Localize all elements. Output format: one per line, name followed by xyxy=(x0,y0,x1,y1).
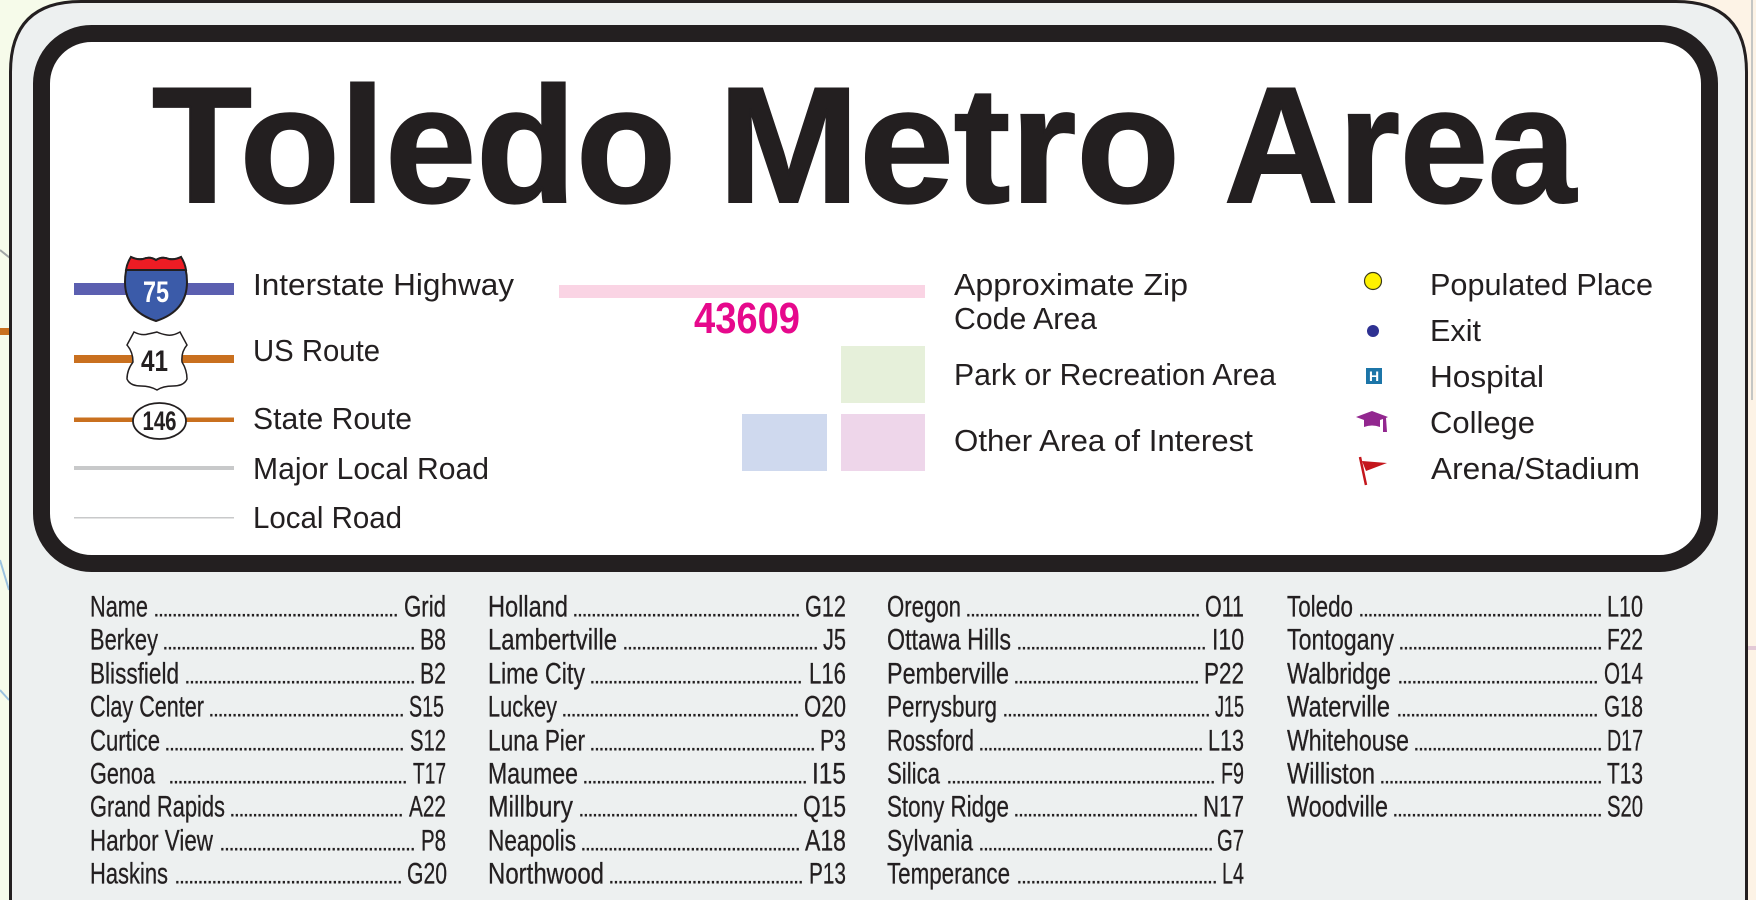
row: Sylvania xyxy=(887,824,1244,858)
row: Harbor View xyxy=(90,824,446,858)
icon: college xyxy=(1356,411,1388,432)
row: Harbor View: P8 xyxy=(421,824,446,858)
index column 2 xyxy=(488,590,846,890)
row: Toledo xyxy=(1287,590,1643,624)
map fragment: right edge roads xyxy=(1748,0,1756,648)
swatch: other area blue xyxy=(742,414,827,471)
row: Toledo: L10 xyxy=(1607,590,1643,624)
swatch: park xyxy=(841,346,925,403)
row: Genoa xyxy=(90,758,446,790)
row: Walbridge: Walbridge xyxy=(1287,658,1391,690)
row: Ottawa Hills: I10 xyxy=(1212,624,1244,656)
row: Williston xyxy=(1287,758,1643,790)
row: Luna Pier xyxy=(488,724,846,758)
local road label: Local Road xyxy=(253,500,402,535)
panel: black framed legend box xyxy=(42,34,1710,564)
arena label: Arena/Stadium xyxy=(1431,451,1640,486)
row: Pemberville xyxy=(887,658,1244,690)
row: Perrysburg xyxy=(887,690,1244,724)
major local road line xyxy=(74,466,234,470)
other area label: Other Area of Interest xyxy=(954,423,1253,458)
row: Northwood: P13 xyxy=(809,858,846,890)
row: Maumee: Maumee xyxy=(488,758,578,790)
row: Temperance: L4 xyxy=(1222,858,1244,890)
row: Oregon: O11 xyxy=(1205,590,1244,624)
icon: interstate shield 75: 75 xyxy=(143,276,169,309)
index column 1 xyxy=(90,590,447,890)
row: Northwood: Northwood xyxy=(488,858,604,890)
row: Pemberville: ........................................ xyxy=(1013,662,1200,690)
icon: state route oval 146: 146 xyxy=(142,406,176,436)
index column 4 xyxy=(1287,590,1643,824)
row: Whitehouse: ......................................... xyxy=(1413,730,1603,756)
row: Lambertville: .......................................... xyxy=(622,628,819,656)
row: Silica: F9 xyxy=(1221,758,1244,790)
interstate highway line xyxy=(74,283,234,295)
title: Metro xyxy=(718,53,1180,237)
row: Neapolis xyxy=(488,824,846,858)
icon: populated place xyxy=(1364,272,1382,290)
icon: state route oval 146 xyxy=(133,403,186,439)
row: Luna Pier: ................................................. xyxy=(589,730,816,756)
college label: College xyxy=(1430,405,1535,440)
row: Waterville: Waterville xyxy=(1287,690,1390,724)
row: Curtice xyxy=(90,724,446,758)
row: Walbridge: O14 xyxy=(1604,658,1643,690)
row: Harbor View: .......................................... xyxy=(219,830,416,856)
row: Waterville xyxy=(1287,690,1643,724)
row: Haskins: G20 xyxy=(407,858,447,890)
icon: hospital xyxy=(1366,368,1382,384)
legend: areas xyxy=(559,267,1277,471)
row: Temperance: ........................................... xyxy=(1016,862,1218,890)
row: Temperance: Temperance xyxy=(887,858,1010,890)
row: Clay Center: .......................................... xyxy=(208,696,405,722)
row: Haskins: ................................................. xyxy=(174,862,403,890)
zip code label: Approximate Zip xyxy=(954,267,1188,302)
zip code label: Code Area xyxy=(954,301,1098,336)
row: Sylvania: ................................................... xyxy=(978,830,1214,856)
row: Whitehouse: Whitehouse xyxy=(1287,724,1409,758)
row: Silica: Silica xyxy=(887,758,940,790)
row: Lambertville xyxy=(488,624,846,656)
row: Blissfield: Blissfield xyxy=(90,658,179,690)
row: Curtice: .................................................... xyxy=(164,730,405,756)
row: Oregon: Oregon xyxy=(887,590,961,624)
row: Pemberville: Pemberville xyxy=(887,658,1009,690)
icon: exit xyxy=(1367,325,1379,337)
row: Northwood xyxy=(488,858,846,890)
row: Tontogany: ............................................ xyxy=(1398,628,1603,656)
row: Waterville: G18 xyxy=(1604,690,1643,724)
row: Name Grid: ..................................................... xyxy=(153,596,399,622)
row: Grand Rapids: A22 xyxy=(409,790,446,824)
zip code label xyxy=(954,267,1188,336)
icon: interstate shield 75 xyxy=(125,257,187,321)
row: Millbury: Millbury xyxy=(488,790,573,824)
row: Genoa: T17 xyxy=(413,758,446,790)
row: Williston: T13 xyxy=(1607,758,1643,790)
index column 3 xyxy=(887,590,1244,890)
row: Sylvania: G7 xyxy=(1217,824,1244,858)
row: Luckey: Luckey xyxy=(488,690,557,724)
row: Stony Ridge: Stony Ridge xyxy=(887,790,1009,824)
row: Holland: ................................................. xyxy=(572,596,801,622)
row: Lime City: .............................................. xyxy=(589,662,803,690)
row: Ottawa Hills: Ottawa Hills xyxy=(887,624,1011,656)
row: Millbury: ................................................ xyxy=(578,796,799,822)
row: Walbridge xyxy=(1287,658,1643,690)
row: Millbury xyxy=(488,790,846,824)
row: Perrysburg: J15 xyxy=(1215,690,1244,724)
row: Clay Center xyxy=(90,690,444,724)
row: Luckey: ................................................... xyxy=(561,696,800,722)
row: Woodville xyxy=(1287,790,1643,824)
row: Luna Pier: P3 xyxy=(820,724,846,758)
us route label: US Route xyxy=(253,333,380,368)
row: Blissfield: B2 xyxy=(420,658,446,690)
state route label: State Route xyxy=(253,401,412,436)
legend: road types xyxy=(74,257,515,535)
row: Millbury: Q15 xyxy=(803,790,846,824)
row: Berkey xyxy=(90,624,446,656)
row: Perrysburg: ............................................. xyxy=(1002,696,1211,722)
row: Berkey: Berkey xyxy=(90,624,158,656)
row: Stony Ridge: ........................................ xyxy=(1013,796,1199,822)
row: Clay Center: Clay Center xyxy=(90,690,204,724)
icon: us route shield 41 xyxy=(127,332,187,390)
state route line xyxy=(74,418,234,422)
row: Genoa: Genoa xyxy=(90,758,155,790)
row: Clay Center: S15 xyxy=(409,690,444,724)
row: Luckey xyxy=(488,690,846,724)
row: Rossford: L13 xyxy=(1208,724,1244,758)
icon: hospital: H xyxy=(1369,368,1379,384)
row: Luckey: O20 xyxy=(804,690,846,724)
zip code bar xyxy=(559,285,925,298)
zip code number: 43609 xyxy=(694,294,800,343)
row: Haskins: Haskins xyxy=(90,858,168,890)
icon: arena flag xyxy=(1360,457,1387,485)
hospital label: Hospital xyxy=(1430,359,1544,394)
row: Silica: .......................................................... xyxy=(946,762,1216,790)
row: Holland xyxy=(488,590,846,624)
row: Name Grid xyxy=(90,590,446,624)
row: Berkey: B8 xyxy=(420,624,446,656)
title xyxy=(152,53,1577,237)
row: Ottawa Hills: ......................................... xyxy=(1016,628,1207,656)
row: Haskins xyxy=(90,858,447,890)
row: Maumee: ................................................. xyxy=(582,762,808,790)
row: Walbridge: ........................................... xyxy=(1397,662,1599,690)
title: Toledo xyxy=(152,53,676,237)
interstate highway label: Interstate Highway xyxy=(253,267,515,302)
row: Tontogany: F22 xyxy=(1607,624,1643,656)
row: Grand Rapids xyxy=(90,790,446,824)
row: Maumee xyxy=(488,758,846,790)
row: Stony Ridge xyxy=(887,790,1244,824)
row: Rossford: ................................................. xyxy=(978,730,1204,756)
row: Neapolis: Neapolis xyxy=(488,824,576,858)
row: Whitehouse: D17 xyxy=(1607,724,1643,758)
row: Pemberville: P22 xyxy=(1204,658,1244,690)
row: Holland: G12 xyxy=(805,590,846,624)
row: Stony Ridge: N17 xyxy=(1203,790,1244,824)
populated place label: Populated Place xyxy=(1430,267,1653,302)
swatch: other area pink xyxy=(841,414,925,471)
park label: Park or Recreation Area xyxy=(954,357,1277,392)
row: Oregon: ................................................... xyxy=(965,596,1201,622)
row: Tontogany: Tontogany xyxy=(1287,624,1394,656)
row: Lambertville: J5 xyxy=(823,624,846,656)
exit label: Exit xyxy=(1430,313,1481,348)
row: Williston: Williston xyxy=(1287,758,1375,790)
row: Lime City: L16 xyxy=(809,658,846,690)
legend: points xyxy=(1356,267,1653,486)
row: Rossford xyxy=(887,724,1244,758)
row: Ottawa Hills xyxy=(887,624,1244,656)
row: Grand Rapids: Grand Rapids xyxy=(90,790,225,824)
major local road label: Major Local Road xyxy=(253,451,489,486)
row: Lime City xyxy=(488,658,846,690)
row: Genoa: .................................................... xyxy=(168,762,408,790)
row: Luna Pier: Luna Pier xyxy=(488,724,585,758)
row: Neapolis: A18 xyxy=(805,824,846,858)
row: Harbor View: Harbor View xyxy=(90,824,213,858)
row: Berkey: ....................................................... xyxy=(162,628,416,656)
row: Maumee: I15 xyxy=(812,758,846,790)
row: Woodville: ............................................. xyxy=(1392,796,1603,822)
title: Area xyxy=(1224,53,1577,237)
us route line xyxy=(74,355,234,363)
row: Rossford: Rossford xyxy=(887,724,974,758)
row: Lime City: Lime City xyxy=(488,658,585,690)
row: Blissfield: .................................................. xyxy=(184,662,416,690)
row: Name Grid: Grid xyxy=(404,590,446,624)
row: Curtice: S12 xyxy=(410,724,446,758)
row: Sylvania: Sylvania xyxy=(887,824,973,858)
row: Silica xyxy=(887,758,1244,790)
row: Lambertville: Lambertville xyxy=(488,624,617,656)
row: Woodville: S20 xyxy=(1607,790,1643,824)
row: Whitehouse xyxy=(1287,724,1643,758)
row: Blissfield xyxy=(90,658,446,690)
row: Temperance xyxy=(887,858,1244,890)
row: Waterville: ............................................ xyxy=(1396,696,1599,722)
row: Name Grid: Name xyxy=(90,590,148,624)
map fragment: left edge roads xyxy=(0,250,10,700)
row: Grand Rapids: ...................................... xyxy=(229,796,404,822)
local road line xyxy=(74,517,234,518)
row: Neapolis: ................................................ xyxy=(580,830,801,856)
row: Williston: ................................................ xyxy=(1379,762,1603,790)
row: Perrysburg: Perrysburg xyxy=(887,690,997,724)
row: Woodville: Woodville xyxy=(1287,790,1388,824)
row: Northwood: .......................................... xyxy=(608,862,804,890)
row: Holland: Holland xyxy=(488,590,568,624)
row: Oregon xyxy=(887,590,1244,624)
row: Toledo: ..................................................... xyxy=(1358,596,1603,622)
row: Tontogany xyxy=(1287,624,1643,656)
row: Toledo: Toledo xyxy=(1287,590,1353,624)
row: Curtice: Curtice xyxy=(90,724,160,758)
icon: us route shield 41: 41 xyxy=(141,345,168,378)
